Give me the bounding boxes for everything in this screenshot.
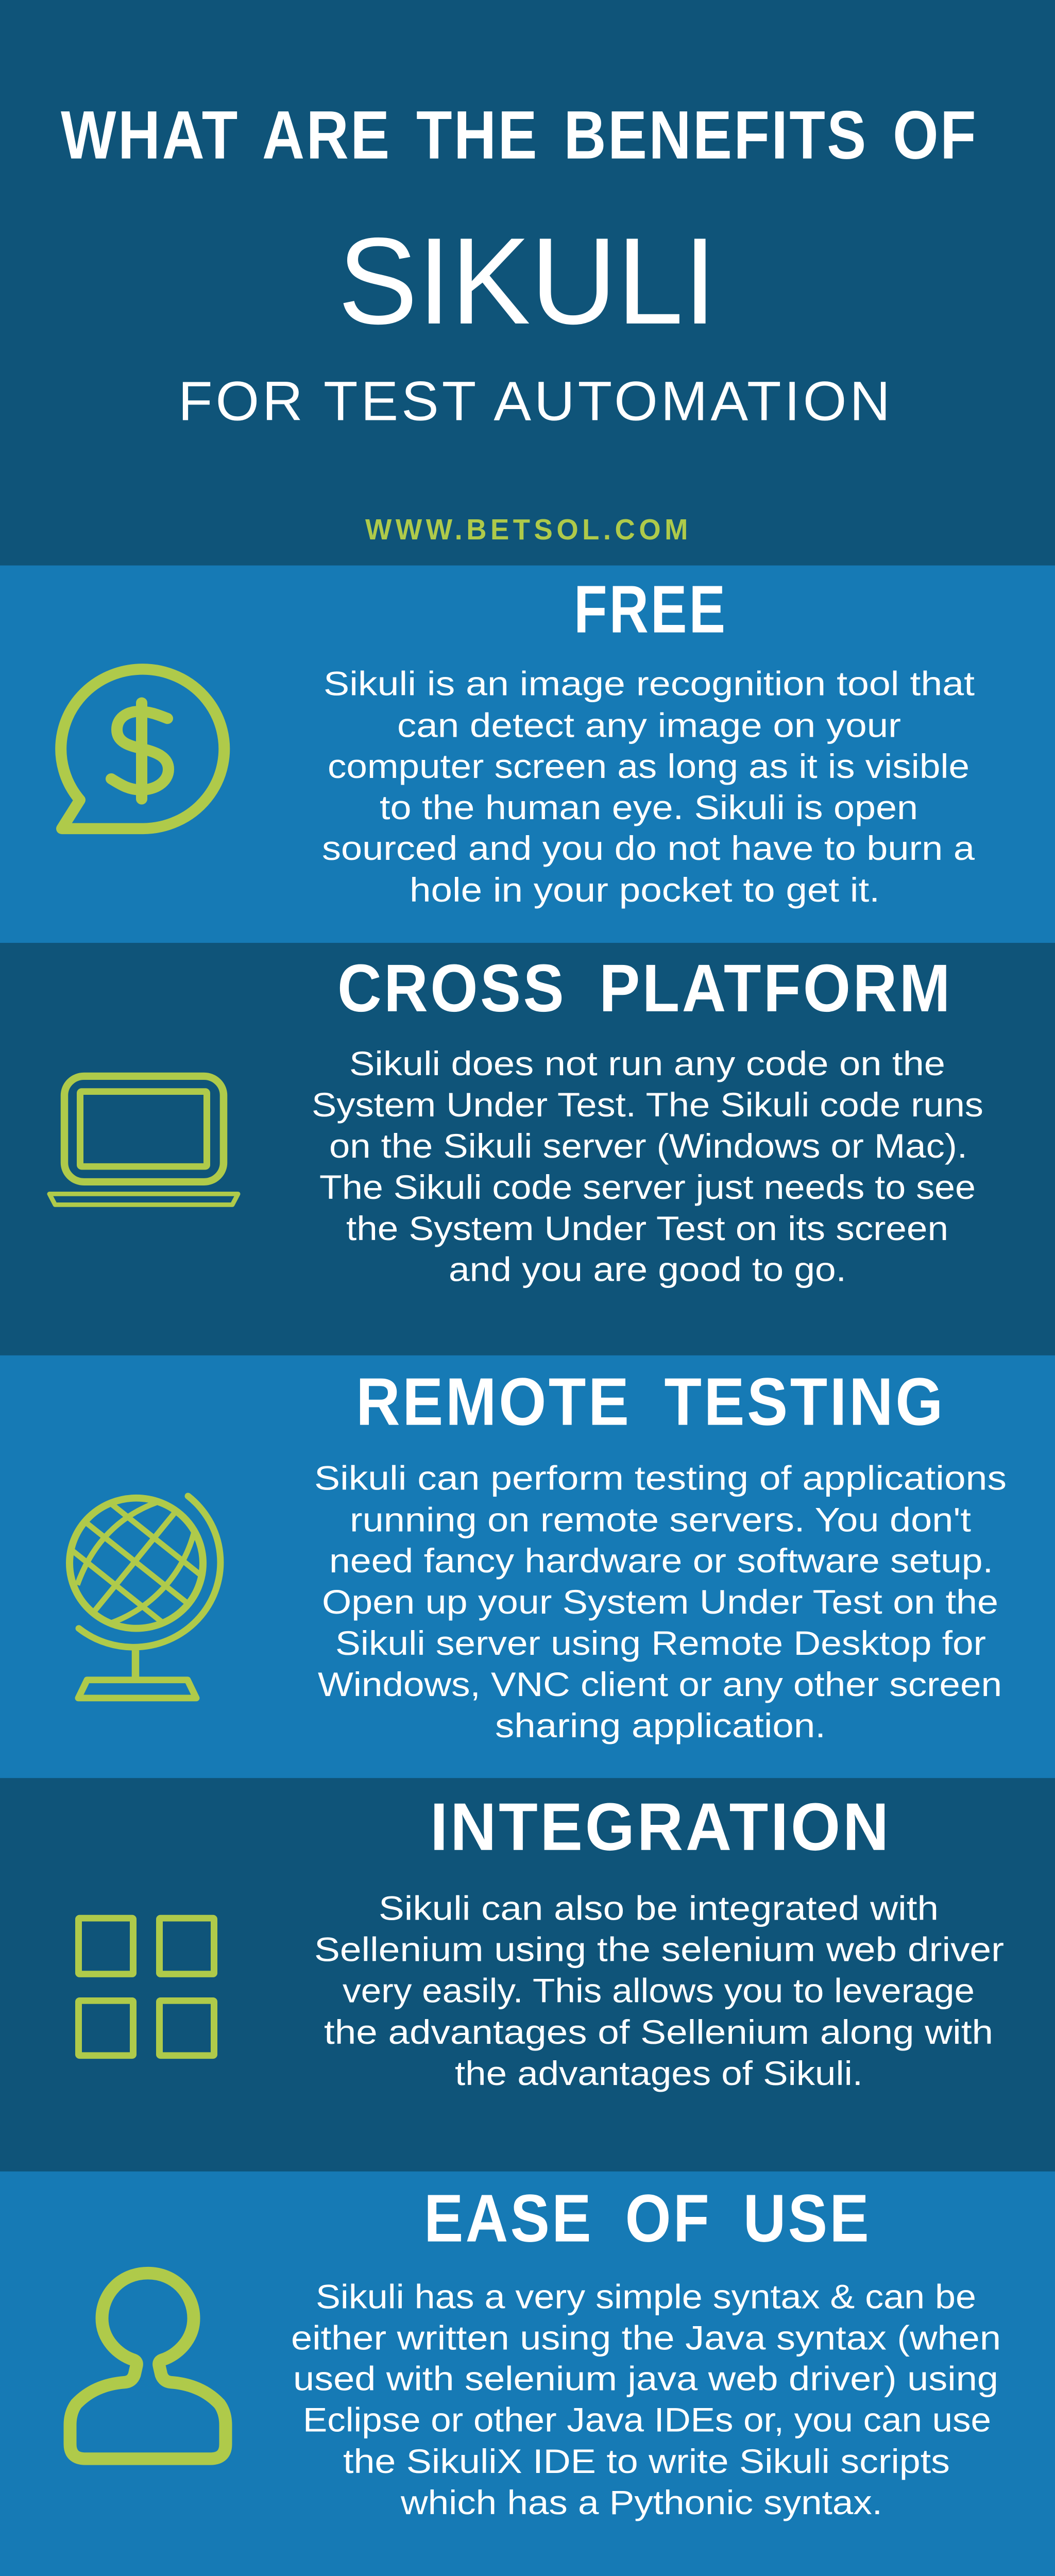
body text: free: computer screen as long as it is visible	[328, 748, 969, 786]
body text: cross platform: Sikuli does not run any code on the	[349, 1045, 945, 1083]
body text: remote testing: need fancy hardware or software setup.	[329, 1542, 993, 1580]
panel: ease of use	[0, 2172, 1055, 2576]
body text: cross platform: and you are good to go.	[449, 1251, 846, 1289]
body text: remote testing: Sikuli can perform testing of applications	[314, 1460, 1007, 1497]
panel: integration	[0, 1778, 1055, 2172]
body text: cross platform	[312, 1045, 983, 1289]
body text: integration: Sikuli can also be integrated with	[379, 1890, 939, 1927]
body text: integration	[314, 1890, 1004, 2093]
icon: dollar speech bubble	[61, 669, 224, 828]
heading: remote testing: REMOTE TESTING	[356, 1364, 945, 1439]
subtitle: for test automation: FOR TEST AUTOMATION	[178, 371, 893, 432]
body text: free: to the human eye. Sikuli is open	[380, 789, 918, 827]
heading: ease of use: EASE OF USE	[424, 2181, 871, 2256]
icon: globe	[52, 1493, 220, 1698]
body text: cross platform: on the Sikuli server (Windows or Mac).	[329, 1128, 967, 1165]
body text: ease of use: Sikuli has a very simple syntax & can be	[316, 2278, 976, 2316]
body text: remote testing: Windows, VNC client or any other screen	[318, 1666, 1002, 1704]
body text: cross platform: System Under Test. The Sikuli code runs	[312, 1087, 983, 1124]
body text: free: sourced and you do not have to burn a	[322, 830, 975, 868]
body text: integration: the advantages of Sellenium along with	[324, 2014, 993, 2052]
body text: ease of use	[291, 2278, 1001, 2522]
body text: remote testing: running on remote servers. You don't	[350, 1501, 971, 1539]
body text: remote testing: Sikuli server using Remote Desktop for	[335, 1625, 986, 1663]
body text: ease of use: either written using the Java syntax (when	[291, 2319, 1001, 2357]
panel: free	[0, 566, 1055, 943]
body text: ease of use: Eclipse or other Java IDEs or, you can use	[303, 2401, 991, 2439]
body text: free: can detect any image on your	[397, 707, 901, 744]
body text: integration: the advantages of Sikuli.	[455, 2055, 863, 2093]
icon: user outline	[70, 2273, 226, 2459]
body text: ease of use: used with selenium java web driver) using	[293, 2360, 998, 2398]
heading: integration: INTEGRATION	[430, 1789, 891, 1865]
panel: remote testing	[0, 1355, 1055, 1778]
body text: integration: very easily. This allows you to leverage	[343, 1972, 975, 2010]
heading: free: FREE	[574, 572, 727, 647]
body text: free: Sikuli is an image recognition tool that	[324, 665, 975, 703]
website url: WWW.BETSOL.COM	[365, 513, 692, 546]
heading: cross platform: CROSS PLATFORM	[337, 951, 952, 1026]
body text: remote testing	[314, 1460, 1007, 1745]
body text: integration: Sellenium using the selenium web driver	[314, 1931, 1004, 1969]
body text: remote testing: sharing application.	[495, 1707, 826, 1745]
body text: free: hole in your pocket to get it.	[410, 872, 880, 909]
icon: laptop	[49, 1076, 238, 1205]
panel: header	[0, 0, 1055, 566]
panel: cross platform	[0, 943, 1055, 1355]
body text: cross platform: The Sikuli code server just needs to see	[319, 1169, 976, 1207]
body text: ease of use: the SikuliX IDE to write Sikuli scripts	[343, 2443, 950, 2481]
body text: ease of use: which has a Pythonic syntax.	[400, 2484, 882, 2522]
icon: four squares	[78, 1918, 214, 2056]
title: Sikuli: SIKULI	[338, 213, 717, 350]
body text: cross platform: the System Under Test on its screen	[346, 1210, 948, 1248]
body text: free	[322, 665, 975, 909]
body text: remote testing: Open up your System Under Test on the	[322, 1584, 998, 1621]
